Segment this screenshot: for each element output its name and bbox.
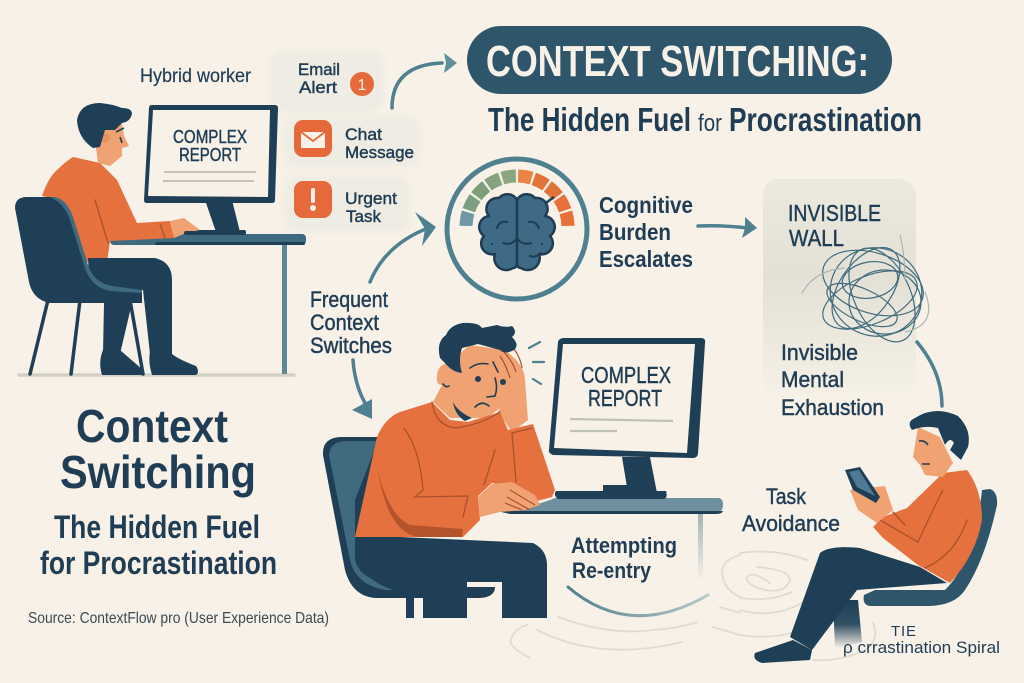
arrow: to title [392, 53, 457, 108]
main heading left: Switching [60, 446, 256, 498]
arc under desk [568, 587, 708, 616]
monitor: complex report [549, 338, 705, 499]
subtitle: for [698, 110, 722, 137]
notification: urgent task: Urgent [345, 189, 397, 208]
arrow: switches to burden [370, 212, 436, 282]
hand [170, 218, 200, 238]
monitor text [173, 127, 247, 165]
panel: worker avoiding with phone [754, 411, 997, 663]
ripples: procrastination spiral [510, 552, 875, 660]
label: frequent context switches [310, 287, 392, 358]
source line: Source: ContextFlow pro (User Experience Data) [28, 610, 329, 627]
hand on desk [478, 482, 540, 517]
chair [15, 197, 143, 374]
label: the procrastination spiral: TIE [891, 623, 916, 640]
notification: email alert: Email [298, 60, 340, 79]
pants [355, 535, 547, 618]
label: attempting re-entry: Re-entry [572, 558, 652, 583]
title pill: CONTEXT SWITCHING: [486, 37, 869, 86]
tangled scribble [802, 235, 934, 352]
head [910, 411, 969, 477]
label: cognitive burden escalates: Cognitive [599, 192, 693, 218]
hand and phone [845, 467, 893, 523]
sweater shadows and folds [378, 344, 535, 537]
keyboard [184, 231, 246, 235]
notification: email alert: 1 [358, 77, 367, 94]
monitor text [581, 362, 671, 411]
gauge with brain [447, 159, 587, 299]
label: the procrastination spiral: ρ crrastination Spiral [843, 638, 1000, 657]
notification bubbles background [270, 50, 420, 232]
label: frequent context switches: Switches [310, 333, 392, 358]
hair [439, 323, 517, 373]
main heading left: The Hidden Fuel [54, 509, 260, 545]
notification: email alert: Alert [299, 78, 337, 97]
gauge segments [466, 176, 568, 227]
label: attempting re-entry [571, 533, 677, 583]
subtitle [488, 101, 922, 138]
label: task avoidance: Avoidance [742, 511, 840, 536]
label: cognitive burden escalates: Burden [599, 219, 671, 245]
label: invisible mental exhaustion: Invisible [781, 340, 858, 365]
monitor text: COMPLEX [173, 127, 247, 147]
monitor: complex report [144, 105, 278, 234]
stress marks [529, 342, 544, 384]
fading rear leg [833, 600, 862, 648]
wall heading: INVISIBLE [788, 200, 881, 226]
chair [864, 489, 997, 606]
head [77, 103, 132, 166]
notification: urgent task [294, 181, 397, 226]
panel: stressed worker at desk [323, 323, 723, 618]
panel: invisible wall [763, 179, 934, 420]
label: hybrid worker: Hybrid worker [140, 66, 252, 87]
monitor text: REPORT [588, 385, 662, 411]
notification: chat message: Chat [345, 125, 382, 144]
main heading left: for Procrastination [40, 545, 277, 581]
shoe [754, 640, 812, 663]
desk [110, 234, 306, 374]
label: invisible mental exhaustion: Exhaustion [781, 395, 884, 420]
label: frequent context switches: Context [310, 310, 379, 335]
head skin and raised arm [433, 345, 528, 432]
arrow: burden to wall [698, 217, 757, 238]
subtitle: Procrastination [729, 101, 922, 138]
main heading left: Context [76, 400, 228, 452]
arrow: wall to avoidance [917, 342, 942, 406]
label: invisible mental exhaustion [781, 340, 884, 420]
monitor text: COMPLEX [581, 362, 671, 388]
face details [443, 362, 506, 407]
monitor text: REPORT [179, 145, 241, 165]
orange sweater [355, 402, 555, 537]
notification: email alert [298, 60, 374, 97]
wall heading: WALL [789, 225, 844, 251]
desk [497, 498, 723, 580]
label: frequent context switches: Frequent [310, 287, 388, 312]
orange shirt [42, 157, 174, 262]
label: cognitive burden escalates: Escalates [599, 246, 693, 272]
pants and shoes [88, 258, 198, 375]
label: cognitive burden escalates [599, 192, 693, 272]
label: invisible mental exhaustion: Mental [781, 367, 844, 392]
panel: hybrid worker at desk [15, 103, 306, 375]
label: task avoidance: Task [766, 484, 807, 509]
orange sweater [873, 470, 982, 583]
main heading left [40, 400, 277, 581]
chair [323, 437, 495, 618]
needle [543, 197, 554, 205]
brain [479, 194, 555, 270]
ear and beard line [453, 402, 472, 421]
wall heading [788, 200, 881, 251]
label: task avoidance [742, 484, 840, 536]
notification: urgent task: Task [346, 207, 381, 226]
notification: chat message: Message [345, 143, 414, 162]
arrow: switches down to stressed worker [352, 360, 372, 419]
subtitle: The Hidden Fuel [488, 101, 691, 138]
notification: chat message [294, 120, 414, 162]
floor line [19, 373, 294, 377]
label: attempting re-entry: Attempting [571, 533, 677, 558]
title pill [467, 26, 892, 94]
sweater folds [880, 490, 967, 568]
gauge ring [447, 159, 587, 299]
label: the procrastination spiral [843, 623, 1000, 657]
pants [790, 547, 947, 650]
